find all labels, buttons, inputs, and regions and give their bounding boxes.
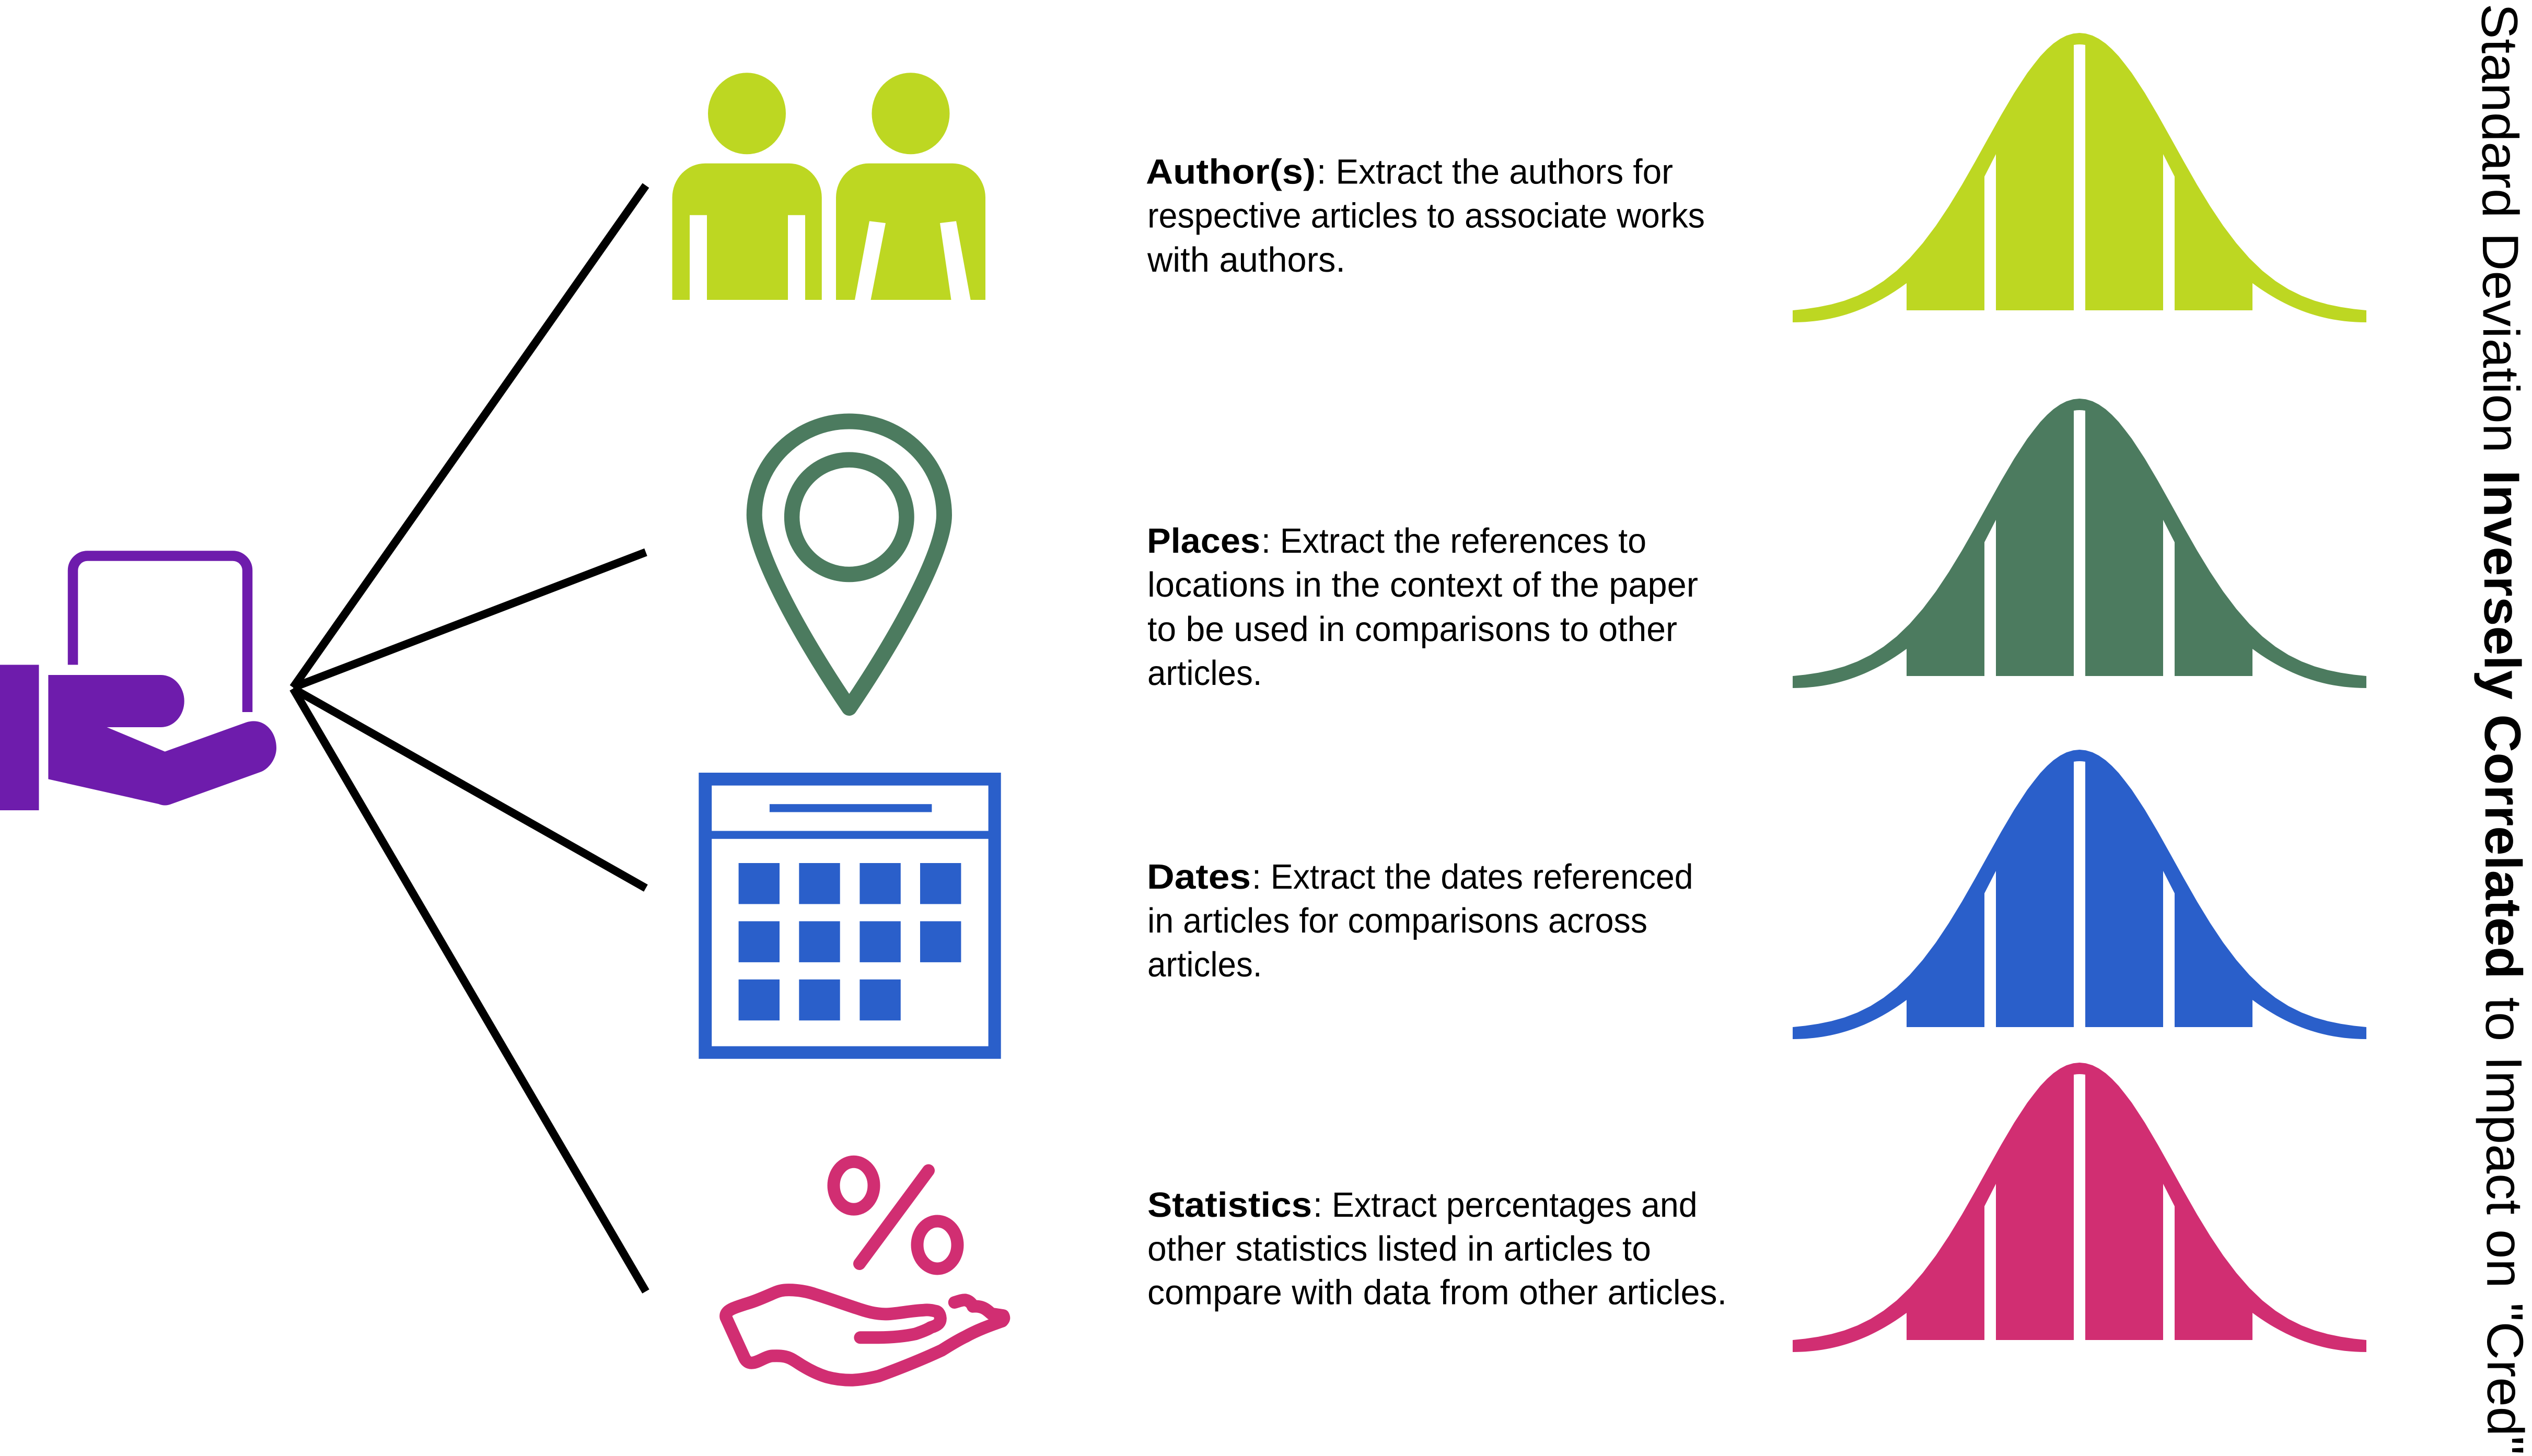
chart: blue bell curve xyxy=(1793,750,2366,1039)
text block: places: : Extract the references to xyxy=(1261,521,1646,561)
text block: statistics: : Extract percentages and xyxy=(1313,1185,1698,1225)
text block: dates: Dates xyxy=(1147,857,1251,896)
chart: lime bell curve xyxy=(1793,33,2366,322)
vertical title: Standard Deviation xyxy=(2471,4,2530,453)
text block: dates xyxy=(1147,857,1693,984)
vertical title xyxy=(2471,4,2532,1455)
text block: dates: : Extract the dates referenced xyxy=(1252,857,1693,896)
text block: authors: respective articles to associate works xyxy=(1147,196,1705,236)
chart: pink bell curve xyxy=(1793,1063,2366,1352)
text block: statistics: other statistics listed in articles to xyxy=(1147,1229,1651,1268)
text block: authors: : Extract the authors for xyxy=(1317,153,1673,192)
icon: hand holding device xyxy=(0,556,276,810)
icon: hand with percent sign (statistics) xyxy=(726,1162,1004,1380)
text block: authors: with authors. xyxy=(1147,240,1345,279)
text block: places: locations in the context of the paper xyxy=(1147,565,1698,604)
text block: places: articles. xyxy=(1147,654,1262,693)
text block: statistics xyxy=(1147,1185,1727,1312)
text block: authors xyxy=(1146,153,1705,279)
text block: statistics: compare with data from other articles. xyxy=(1147,1273,1727,1312)
text block: places xyxy=(1147,521,1698,693)
connector lines xyxy=(293,185,646,1291)
vertical title: Inversely Correlated xyxy=(2473,470,2532,979)
icon: location pin (places) xyxy=(754,421,944,708)
text block: statistics: Statistics xyxy=(1147,1185,1312,1225)
text block: authors: Author(s) xyxy=(1146,153,1316,192)
icon: two people (authors) xyxy=(672,73,985,300)
text block: places: Places xyxy=(1147,521,1260,561)
chart: green bell curve xyxy=(1793,399,2366,688)
text block: dates: in articles for comparisons across xyxy=(1147,901,1647,940)
icon: calendar (dates) xyxy=(699,773,1001,1059)
text block: dates: articles. xyxy=(1147,945,1262,984)
text block: places: to be used in comparisons to other xyxy=(1147,610,1677,649)
